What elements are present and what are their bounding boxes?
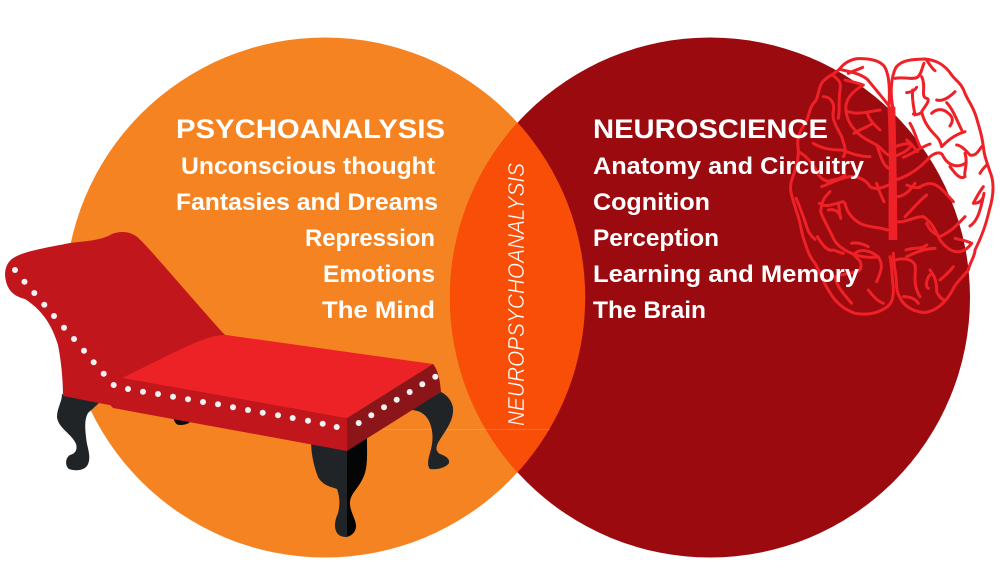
brain right hemisphere — [891, 59, 993, 313]
rear-left leg — [57, 394, 99, 470]
backrest and rail — [5, 232, 347, 451]
heading: neuroscience: NEUROSCIENCE — [593, 114, 828, 144]
nail-head trim — [12, 267, 438, 430]
text block: psychoanalysis: Fantasies and Dreams — [176, 189, 438, 216]
heading: psychoanalysis: PSYCHOANALYSIS — [176, 114, 445, 144]
text block: psychoanalysis: Repression — [305, 225, 435, 252]
right side rail — [347, 364, 441, 451]
circle: neuroscience — [450, 38, 970, 558]
text block: neuroscience: Anatomy and Circuitry — [593, 153, 865, 180]
text block: psychoanalysis — [176, 114, 445, 324]
back small leg — [173, 416, 191, 425]
text block: neuroscience: The Brain — [593, 297, 706, 324]
text block: neuroscience — [593, 114, 865, 324]
brain central fissure — [887, 107, 897, 240]
icon: chaise longue — [5, 232, 453, 537]
icon: brain — [791, 59, 993, 314]
front leg — [311, 438, 367, 537]
overlap: neuropsychoanalysis lens — [450, 122, 585, 472]
front leg lit side — [311, 440, 347, 537]
text block: neuroscience: Cognition — [593, 189, 710, 216]
text block: psychoanalysis: Unconscious thought — [181, 153, 435, 180]
brain left hemisphere — [791, 59, 893, 314]
label: neuropsychoanalysis: NEUROPSYCHOANALYSIS — [503, 162, 529, 426]
circle: psychoanalysis — [65, 38, 585, 558]
text block: neuroscience: Perception — [593, 225, 719, 252]
front rail — [92, 370, 347, 451]
front leg shaded side — [345, 438, 367, 537]
text block: neuroscience: Learning and Memory — [593, 261, 860, 288]
text block: psychoanalysis: The Mind — [322, 297, 435, 324]
text block: psychoanalysis: Emotions — [323, 261, 435, 288]
right leg — [410, 392, 453, 469]
seat cushion — [122, 335, 433, 418]
